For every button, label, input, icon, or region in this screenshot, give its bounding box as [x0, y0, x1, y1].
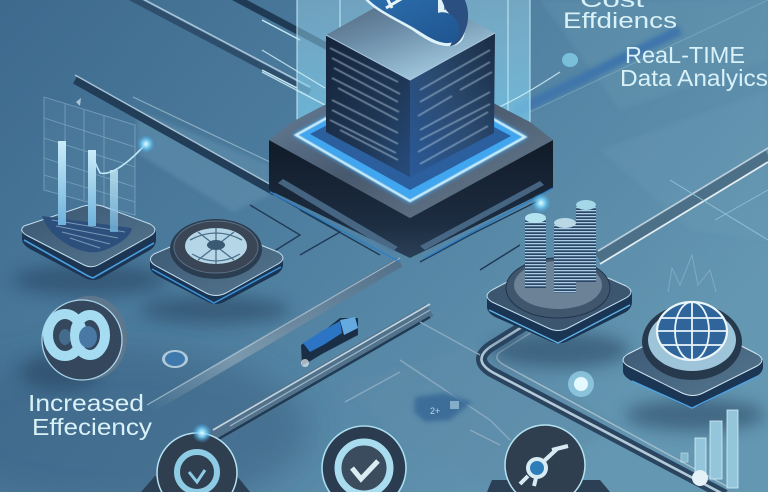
- key glyph: [520, 446, 568, 486]
- rail: upper right blue: [515, 0, 768, 112]
- node: server towers: [487, 193, 632, 343]
- node: globe: [623, 302, 763, 408]
- ventilation grille left: [278, 179, 398, 252]
- rail: right gray: [598, 148, 768, 264]
- cube left face: [326, 35, 410, 177]
- gauge ring: [170, 219, 262, 279]
- faint people hologram: [668, 255, 716, 292]
- train icon: [301, 317, 358, 367]
- label: Increased Efficiency: Increased: [28, 390, 144, 416]
- platform side walls: [269, 140, 553, 258]
- tower 2: [554, 218, 576, 293]
- label: Increased Efficiency: [28, 390, 153, 440]
- platform top surface: [269, 60, 553, 218]
- glow dot: [192, 423, 212, 443]
- gear icon right: [75, 315, 105, 355]
- cube top: [326, 0, 495, 80]
- data chip on floor: 2+: [430, 406, 440, 416]
- central server platform: [269, 60, 553, 262]
- server cube: [326, 0, 495, 177]
- node: bar chart: [22, 97, 156, 280]
- cube right face: [410, 33, 495, 177]
- thin floor traces: [250, 192, 540, 445]
- rail: upper left: [75, 0, 330, 192]
- rail: lower right with bend: [481, 322, 730, 492]
- label: Increased Efficiency: Effeciency: [32, 414, 153, 440]
- holographic grid panel: [44, 97, 135, 215]
- label: Cost Efficiency: Effdiencs: [563, 8, 677, 33]
- upward arrow marker: [76, 98, 81, 106]
- light beam around server cube: [262, 0, 560, 200]
- glowing orb: [568, 371, 594, 397]
- chart bars: [58, 141, 118, 232]
- chart base platform: [22, 205, 156, 280]
- node: key circle bottom: [487, 425, 610, 492]
- node: check mark circle: [322, 426, 406, 492]
- tower 3: [576, 200, 596, 282]
- label: Real-Time Data Analytics: [620, 42, 768, 91]
- cloud X glyph: [386, 0, 406, 8]
- blue glowing ring: [293, 70, 528, 203]
- gear icon left: [48, 314, 82, 356]
- code lines right face: [418, 50, 492, 164]
- platform drop shadows: [12, 264, 765, 431]
- code lines left face: [330, 48, 400, 160]
- glow dot: [531, 193, 551, 213]
- label: Cost Efficiency: [563, 0, 677, 33]
- label: Real-Time Data Analytics: ReaL-TIME: [625, 42, 745, 68]
- blue node on rail: [562, 53, 578, 67]
- gauge base: [150, 258, 283, 304]
- node: gears: [42, 296, 127, 380]
- data chip on floor: [414, 393, 472, 422]
- node: ring circle bottom left: [141, 423, 250, 492]
- node: gauge: [150, 219, 283, 304]
- rail: centre diagonal: [147, 258, 430, 441]
- globe sphere: [657, 302, 727, 360]
- ventilation grille right: [420, 181, 544, 250]
- label: Real-Time Data Analytics: Data Analyics: [620, 65, 768, 91]
- data bars bottom right: [681, 410, 738, 488]
- globe base: [623, 360, 763, 407]
- tower 1: [525, 213, 546, 288]
- trend line: [90, 145, 145, 173]
- glow dot: [137, 135, 155, 153]
- tower base: [487, 292, 632, 343]
- small chip token: [162, 350, 188, 368]
- gauge dial: [185, 228, 247, 264]
- cloud icon: [362, 0, 468, 46]
